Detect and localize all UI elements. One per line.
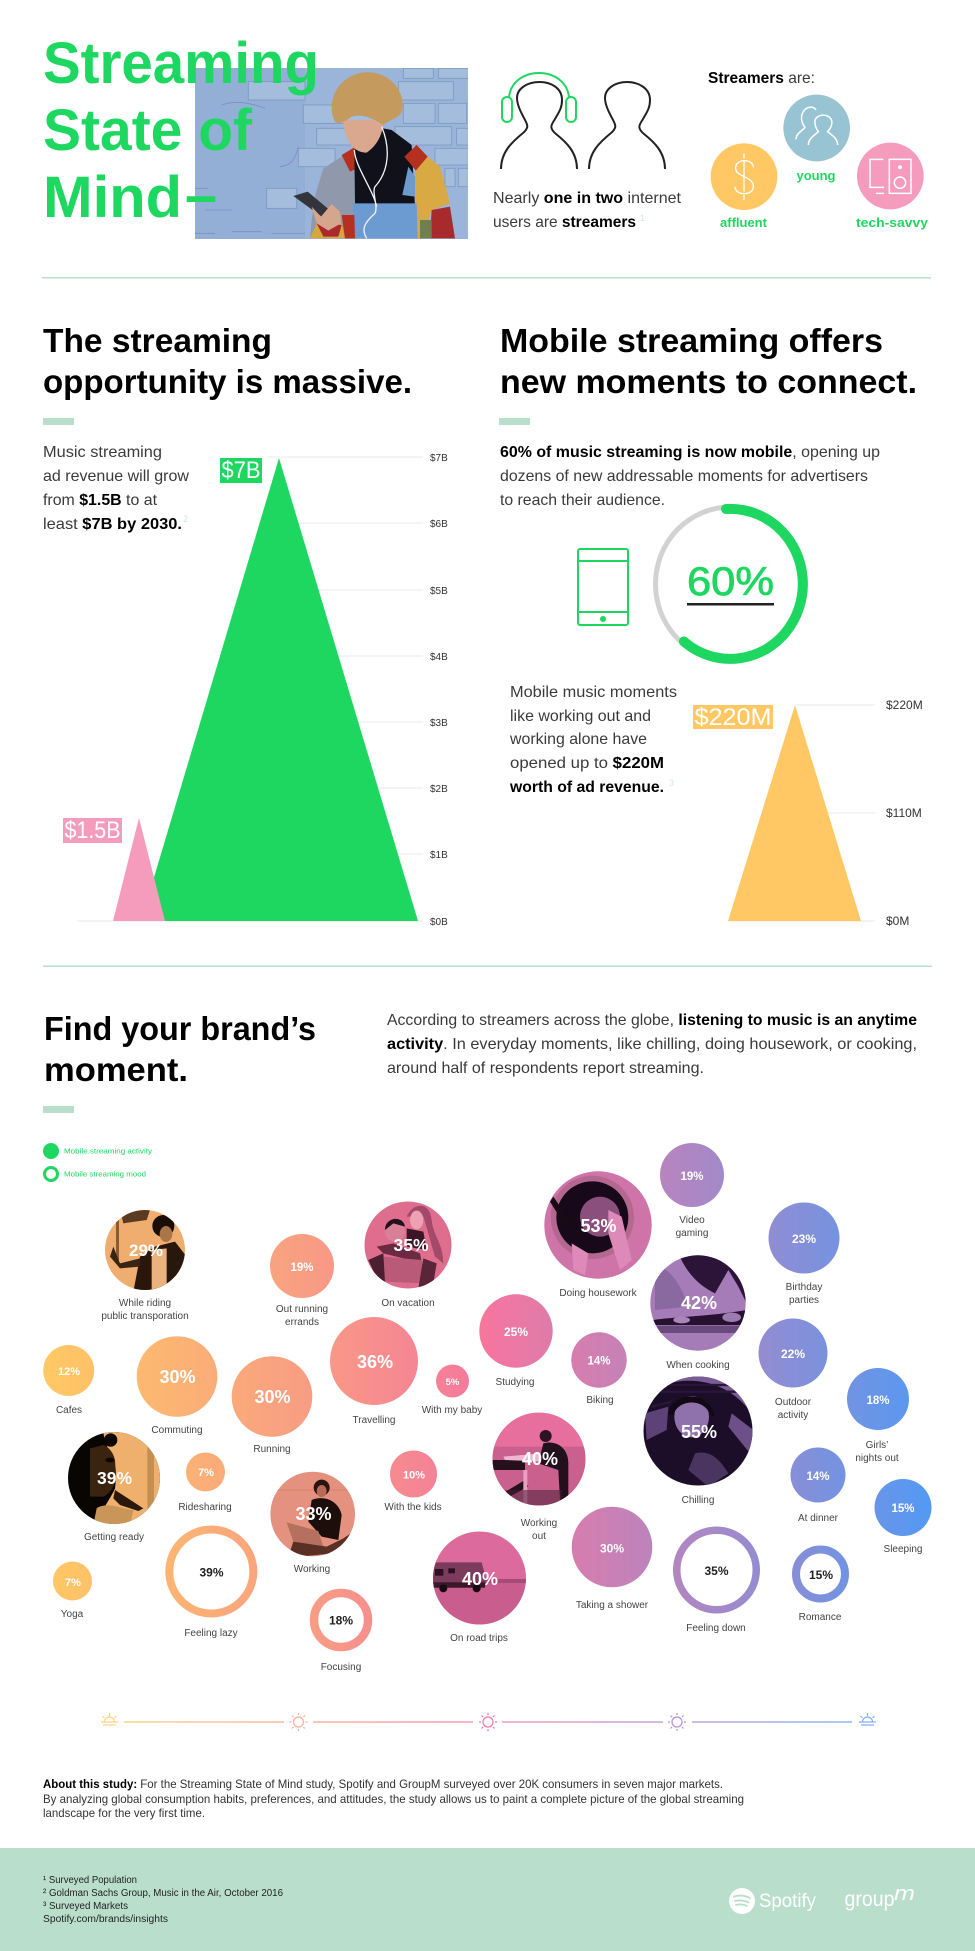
bubble: yoga: [53, 1562, 92, 1620]
bubble: romance: [796, 1550, 845, 1623]
bubble: outdoor activity: Outdoor: [775, 1397, 812, 1408]
text: about this study: landscape for the very first time.: [43, 1806, 205, 1820]
title: [43, 31, 319, 230]
text: mobile moments: opened up to $220M: [510, 755, 664, 772]
title: State of: [43, 98, 253, 163]
bubble: working: 33%: [295, 1504, 332, 1524]
bubble: with the kids: [384, 1450, 442, 1513]
bubble: birthday parties: parties: [789, 1295, 819, 1306]
bubble: focusing: [314, 1593, 368, 1673]
chart: 60 percent ring: [656, 507, 806, 661]
bubble: public transportation: public transporation: [101, 1311, 189, 1322]
axis labels: $7B: [430, 453, 448, 464]
bubble: studying: [479, 1294, 553, 1388]
bubble: travelling: [330, 1317, 418, 1426]
bubble: with my baby: 5%: [446, 1377, 460, 1388]
heading: streaming opportunity: [43, 322, 412, 400]
bubble: public transportation: [101, 1208, 189, 1322]
text: mobile share: 60% of music streaming is now mobile, opening up: [500, 444, 880, 461]
heading: streamers are: Streamers are:: [708, 70, 815, 87]
axis labels: $3B: [430, 718, 448, 729]
bubble: feeling lazy: 39%: [199, 1566, 224, 1580]
heading: streaming opportunity: opportunity is massive.: [43, 363, 412, 400]
cardigan and clothes: [310, 157, 355, 238]
text: about this study: By analyzing global consumption habits, preferences, and attitudes, the study allows us to paint a complete picture of the global streaming: [43, 1792, 744, 1806]
legend: Mobile streaming mood: [64, 1170, 146, 1178]
bubble: doing housework: Doing housework: [559, 1288, 638, 1299]
icon: evening sun: [668, 1713, 686, 1731]
bubble: working out: 40%: [522, 1449, 558, 1469]
logo: Spotify: Spotify: [759, 1891, 816, 1912]
bubble: when cooking: When cooking: [666, 1360, 730, 1371]
bubble: with the kids: 10%: [403, 1470, 425, 1482]
chart: 220M triangle: [693, 698, 923, 928]
text: mobile share: to reach their audience.: [500, 492, 665, 509]
axis labels: [430, 453, 448, 928]
bubble: birthday parties: [768, 1202, 840, 1306]
label: tech-savvy: tech-savvy: [856, 215, 929, 230]
bubble: girls' nights out: [847, 1368, 909, 1464]
bubble: outdoor activity: [758, 1318, 828, 1421]
bubble: travelling: 36%: [357, 1352, 393, 1372]
icon: morning sun: [290, 1713, 308, 1731]
logo: Spotify: [729, 1888, 816, 1914]
bubble: focusing: Focusing: [321, 1662, 361, 1673]
bubble: getting ready: Getting ready: [84, 1532, 144, 1543]
label: affluent: affluent: [720, 215, 768, 230]
bubble: cafes: Cafes: [56, 1405, 82, 1416]
bubble: out running errands: [270, 1234, 334, 1328]
text: mobile share: [500, 444, 880, 509]
head: [343, 120, 383, 153]
label: young: young: [796, 168, 836, 183]
bubble: video gaming: gaming: [676, 1228, 708, 1239]
bubble: studying: Studying: [496, 1377, 534, 1388]
bubble: running: Running: [253, 1444, 291, 1455]
bubble chart: streaming moments: [43, 1143, 931, 1673]
bubble: public transportation: 29%: [129, 1241, 163, 1260]
logo: GroupM: m: [894, 1883, 915, 1905]
axis labels: $4B: [430, 652, 448, 663]
bubble: sleeping: 15%: [891, 1503, 915, 1515]
footnotes: [43, 1875, 283, 1925]
bubble: on road trips: 40%: [462, 1569, 498, 1589]
bubble: running: 30%: [254, 1387, 291, 1407]
axis labels: $1B: [430, 850, 448, 861]
bubble: with my baby: With my baby: [422, 1405, 482, 1416]
bubble: out running errands: errands: [285, 1317, 319, 1328]
bubble: on vacation: 35%: [393, 1235, 429, 1255]
bubble: commuting: [137, 1336, 217, 1436]
bubble: chilling: 55%: [681, 1422, 717, 1442]
bubble: video gaming: Video: [679, 1215, 705, 1226]
bubble: working: Working: [294, 1564, 330, 1575]
axis labels: $110M: [886, 806, 922, 820]
bubble: commuting: Commuting: [151, 1425, 203, 1436]
bubble: outdoor activity: 22%: [781, 1347, 805, 1361]
label: 7B: $7B: [222, 457, 260, 484]
bubble: running: [232, 1356, 312, 1455]
text: anytime activity: According to streamers across the globe, listening to music is an anytime: [387, 1012, 917, 1029]
bubble: with my baby: [422, 1364, 482, 1416]
text: mobile moments: worth of ad revenue.: [509, 779, 664, 796]
logo: GroupM: group: [844, 1888, 894, 1911]
bubble: ridesharing: Ridesharing: [178, 1502, 232, 1513]
phone and hand: [294, 192, 328, 216]
panel: mobile streaming: [499, 322, 923, 928]
text: one in two users are streamers: [493, 190, 682, 231]
bubble: yoga: Yoga: [61, 1609, 84, 1620]
bubble: working: [268, 1470, 357, 1575]
text: about this study: About this study: For the Streaming State of Mind study, Spotify and GroupM surveyed over 20K consumers in seven major markets.: [43, 1777, 723, 1791]
icon: two streamers, one wearing headphones: [501, 73, 665, 169]
bubble: public transportation: While riding: [119, 1298, 171, 1309]
heading: mobile streaming: new moments to connect.: [500, 363, 917, 400]
icon: tech-savvy: [857, 143, 924, 209]
footnotes: ² Goldman Sachs Group, Music in the Air, October 2016: [43, 1888, 283, 1899]
text: revenue growth: Music streaming: [43, 444, 162, 461]
bubble: outdoor activity: activity: [778, 1410, 808, 1421]
axis labels: $220M: [886, 698, 923, 712]
text: mobile moments: Mobile music moments: [510, 684, 677, 701]
bubble: when cooking: [648, 1253, 748, 1371]
bubble: girls' nights out: nights out: [855, 1453, 899, 1464]
bubble: on vacation: [363, 1200, 453, 1309]
bubble: at dinner: At dinner: [798, 1513, 839, 1524]
bubble: feeling lazy: Feeling lazy: [184, 1628, 238, 1639]
chart: 60 percent ring: 60%: [687, 560, 774, 604]
label: 1.5B: $1.5B: [64, 817, 120, 844]
logo: GroupM: [844, 1883, 915, 1911]
heading: find your brand's moment: moment.: [44, 1051, 188, 1088]
icon: phone: [578, 549, 628, 625]
bubble: out running errands: Out running: [276, 1304, 328, 1315]
heading: streaming opportunity: The streaming: [43, 322, 272, 359]
bubble: getting ready: [65, 1430, 162, 1543]
bubble: travelling: Travelling: [353, 1415, 395, 1426]
legend: [43, 1143, 152, 1180]
bubble: feeling down: 35%: [704, 1564, 729, 1578]
heading: find your brand's moment: [44, 1010, 316, 1088]
bubble: ridesharing: [178, 1452, 232, 1513]
icon: sunset: [859, 1713, 876, 1725]
title: Streaming: [43, 31, 319, 96]
icon: young: [783, 95, 850, 161]
text: anytime activity: activity. In everyday moments, like chilling, doing housework, or cooking,: [387, 1036, 917, 1053]
heading: mobile streaming: [500, 322, 917, 400]
bubble: biking: 14%: [587, 1356, 611, 1368]
bubble: focusing: 18%: [329, 1614, 353, 1628]
title: –: [185, 163, 217, 228]
title: Mind: [43, 165, 182, 230]
bubble: on road trips: [430, 1530, 528, 1644]
text: anytime activity: [387, 1012, 917, 1077]
bubble: working out: out: [532, 1531, 546, 1542]
footer band: [0, 1848, 975, 1951]
bubble: girls' nights out: 18%: [866, 1395, 890, 1407]
triangle: 7B: [141, 458, 418, 921]
bubble: biking: [571, 1332, 627, 1406]
bubble: on road trips: On road trips: [450, 1633, 508, 1644]
axis labels: [886, 698, 923, 928]
bubble: at dinner: [790, 1448, 846, 1524]
bubble: sleeping: [874, 1479, 932, 1555]
footnotes: ³ Surveyed Markets: [43, 1901, 128, 1912]
text: anytime activity: around half of respondents report streaming.: [387, 1060, 704, 1077]
bubble: feeling down: [677, 1530, 756, 1634]
bubble: feeling down: Feeling down: [686, 1623, 746, 1634]
bubble: sleeping: Sleeping: [884, 1544, 922, 1555]
text: mobile moments: like working out and: [510, 708, 651, 725]
bubble: girls' nights out: Girls’: [866, 1440, 888, 1451]
heading: find your brand's moment: Find your brand’s: [44, 1010, 316, 1047]
bubble: romance: 15%: [809, 1568, 833, 1582]
bubble: taking a shower: Taking a shower: [576, 1600, 649, 1611]
text: revenue growth: 2: [183, 514, 188, 524]
bubble: birthday parties: 23%: [792, 1232, 816, 1246]
bubble: video gaming: 19%: [680, 1171, 704, 1183]
text: mobile moments: 3: [669, 778, 674, 788]
text: one in two users are streamers: 1: [640, 213, 645, 223]
chart: ad revenue triangles: [63, 453, 448, 928]
bubble: taking a shower: 30%: [600, 1542, 624, 1556]
bubble: chilling: Chilling: [682, 1495, 714, 1506]
triangle: 1.5B: [113, 818, 165, 921]
bubble: chilling: [642, 1373, 755, 1506]
axis labels: $5B: [430, 586, 448, 597]
bubble: getting ready: 39%: [97, 1468, 132, 1488]
bubble: out running errands: 19%: [290, 1262, 314, 1274]
bubble: working out: [492, 1412, 587, 1542]
heading: mobile streaming: Mobile streaming offers: [500, 322, 883, 359]
text: mobile moments: working alone have: [509, 731, 647, 748]
bubble: birthday parties: Birthday: [786, 1282, 822, 1293]
icon: noon sun: [479, 1713, 497, 1731]
bubble: biking: Biking: [586, 1395, 614, 1406]
bubble: romance: Romance: [799, 1612, 842, 1623]
bubble: on vacation: On vacation: [381, 1298, 435, 1309]
bubble: working out: Working: [521, 1518, 557, 1529]
text: about this study: [43, 1777, 744, 1820]
bubble: taking a shower: [572, 1507, 652, 1611]
axis labels: $0B: [430, 917, 448, 928]
bubble: doing housework: [542, 1170, 653, 1299]
axis labels: $6B: [430, 519, 448, 530]
bubble: when cooking: 42%: [681, 1293, 717, 1313]
header photo: listener with phone against a brick wall: [195, 67, 470, 240]
bubble: ridesharing: 7%: [198, 1467, 214, 1479]
text: one in two users are streamers: Nearly one in two internet: [493, 190, 682, 207]
text: revenue growth: ad revenue will grow: [43, 468, 189, 485]
bubble: studying: 25%: [504, 1325, 528, 1339]
bubble: yoga: 7%: [65, 1577, 81, 1589]
text: revenue growth: [43, 444, 189, 533]
text: mobile share: dozens of new addressable moments for advertisers: [500, 468, 868, 485]
panel: streaming opportunity: [43, 322, 448, 928]
text: revenue growth: from $1.5B to at: [43, 492, 158, 509]
bubble: cafes: 12%: [58, 1366, 80, 1378]
label: 220M: $220M: [694, 704, 772, 731]
footnotes: Spotify.com/brands/insights: [43, 1914, 168, 1925]
bubble: video gaming: [660, 1143, 724, 1239]
icon: sunrise: [101, 1713, 118, 1725]
legend: Mobile streaming activity: [64, 1146, 152, 1156]
timeline: day from sunrise to sunset: [101, 1713, 876, 1731]
text: mobile moments: [509, 684, 677, 796]
axis labels: $0M: [886, 914, 909, 928]
text: revenue growth: least $7B by 2030.: [43, 516, 182, 533]
bubble: feeling lazy: [169, 1530, 253, 1639]
icon: affluent: [711, 143, 777, 210]
axis labels: $2B: [430, 784, 448, 795]
bubble: cafes: [43, 1345, 94, 1416]
bubble: doing housework: 53%: [580, 1216, 617, 1236]
footnotes: ¹ Surveyed Population: [43, 1875, 137, 1886]
bubble: commuting: 30%: [159, 1367, 196, 1387]
text: one in two users are streamers: users are streamers: [493, 214, 636, 231]
bubble: at dinner: 14%: [806, 1471, 830, 1483]
bubble: with the kids: With the kids: [384, 1502, 442, 1513]
